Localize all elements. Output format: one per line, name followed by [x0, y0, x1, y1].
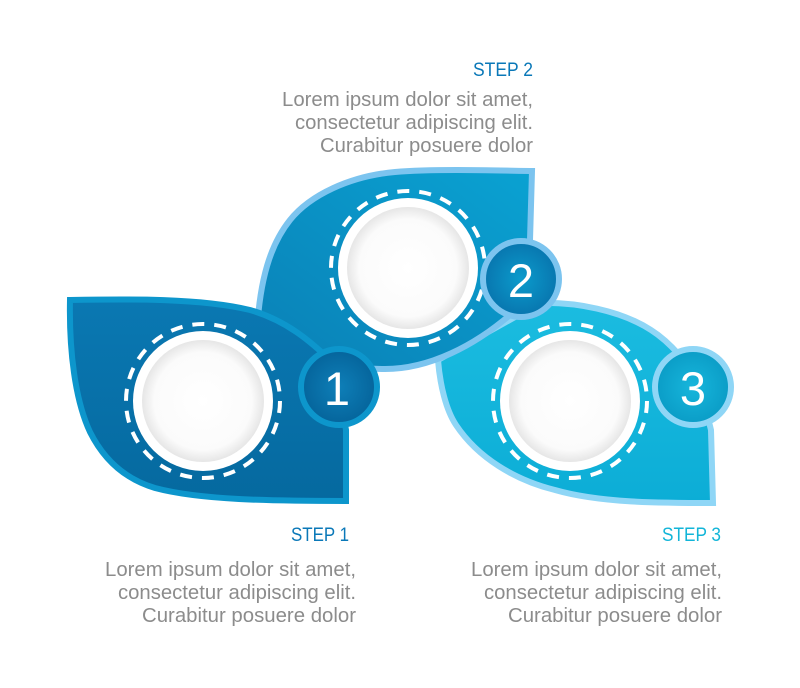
- panel: step 2 leaf: [257, 170, 532, 369]
- text block: step 2: Curabitur posuere dolor: [320, 135, 533, 157]
- leaf shape 3: [438, 303, 713, 503]
- text block: step 1: Curabitur posuere dolor: [142, 605, 356, 627]
- text block: step 1: [105, 559, 356, 627]
- number badge 2: 2: [508, 254, 534, 307]
- dashed ring 1: [126, 324, 280, 478]
- heading: step 2: STEP 2: [473, 60, 533, 81]
- image circle 1: [133, 331, 273, 471]
- text block: step 2: [282, 89, 533, 157]
- text block: step 2: Lorem ipsum dolor sit amet,: [282, 89, 533, 111]
- number badge 2: [483, 241, 559, 317]
- text block: step 3: consectetur adipiscing elit.: [484, 582, 722, 604]
- panel: step 3 leaf: [438, 303, 713, 503]
- number badge 1: 1: [324, 362, 350, 415]
- text block: step 1: consectetur adipiscing elit.: [118, 582, 356, 604]
- heading: step 3: STEP 3: [662, 525, 721, 546]
- text block: step 3: Lorem ipsum dolor sit amet,: [471, 559, 722, 581]
- text block: step 3: Curabitur posuere dolor: [508, 605, 722, 627]
- image circle 2: [338, 198, 478, 338]
- text block: step 1: Lorem ipsum dolor sit amet,: [105, 559, 356, 581]
- text block: step 2: consectetur adipiscing elit.: [295, 112, 533, 134]
- number badge 1: [301, 349, 377, 425]
- heading: step 1: STEP 1: [291, 525, 349, 546]
- leaf shape 2: [257, 170, 532, 369]
- number badge 3: [655, 349, 731, 425]
- dashed ring 3: [493, 324, 647, 478]
- image circle 3: [500, 331, 640, 471]
- panel: step 1 leaf: [70, 299, 346, 501]
- number badge 3: 3: [680, 362, 706, 415]
- dashed ring 2: [331, 191, 485, 345]
- text block: step 3: [471, 559, 722, 627]
- leaf shape 1: [70, 299, 346, 501]
